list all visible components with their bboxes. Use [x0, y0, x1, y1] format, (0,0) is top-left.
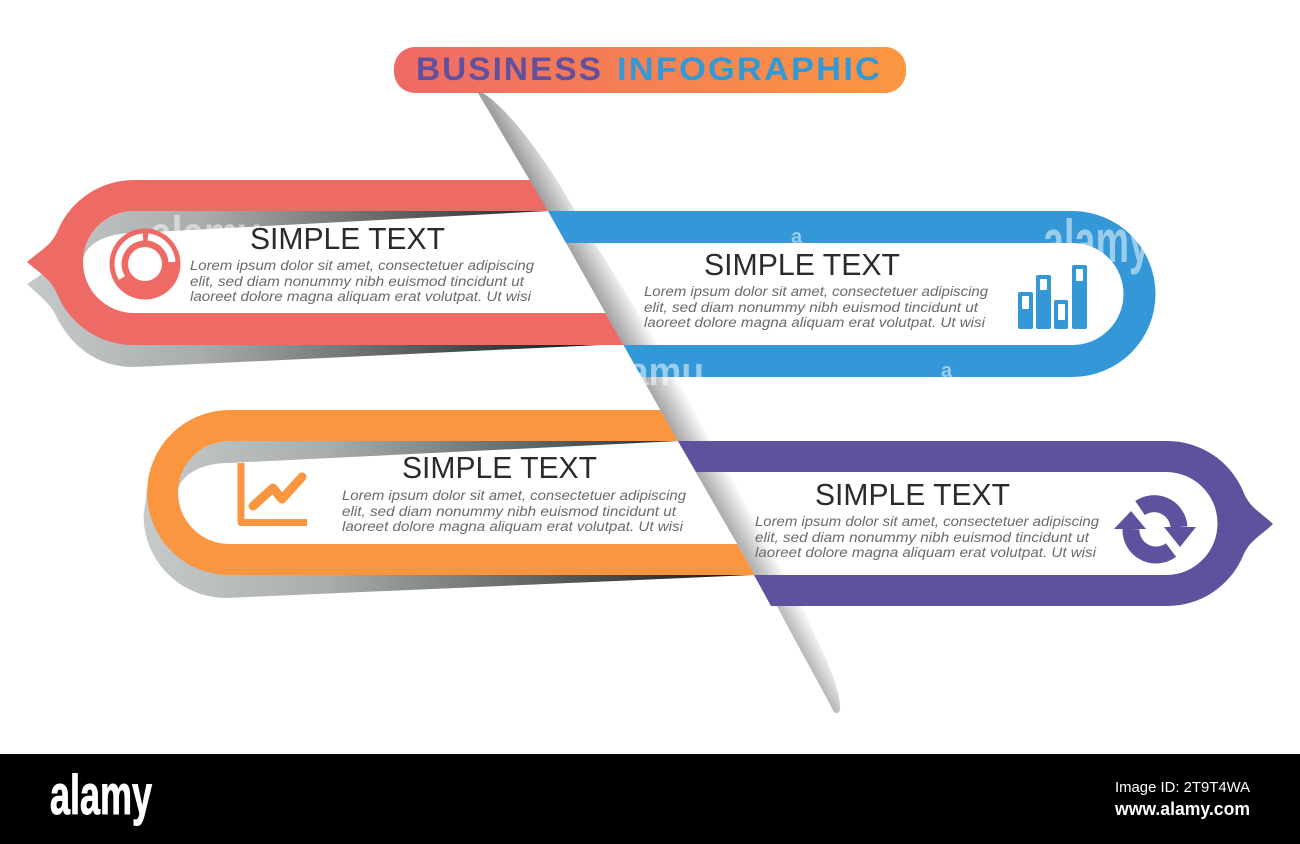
icon: donut chart — [110, 228, 180, 300]
red body text: laoreet dolore magna aliquam erat volutpat. Ut wisi — [190, 289, 532, 304]
watermarks on blue ribbon: amu — [628, 350, 704, 394]
red inner shadow — [83, 211, 548, 262]
footer bar — [0, 754, 1300, 844]
panel: purple step — [678, 441, 1273, 606]
red body text: Lorem ipsum dolor sit amet, consectetuer adipiscing — [190, 258, 535, 273]
orange body text — [342, 488, 687, 534]
watermarks on blue ribbon: alamy — [1043, 208, 1150, 275]
footer url: www.alamy.com — [1114, 799, 1250, 819]
panel: blue step — [548, 208, 1156, 394]
orange body text: elit, sed diam nonummy nibh euismod tincidunt ut — [342, 504, 677, 519]
blue body text: laoreet dolore magna aliquam erat volutpat. Ut wisi — [644, 315, 986, 330]
orange inner shadow — [178, 441, 679, 492]
purple body text: Lorem ipsum dolor sit amet, consectetuer adipiscing — [755, 514, 1100, 529]
central diagonal blade — [478, 93, 840, 713]
orange heading: SIMPLE TEXT — [402, 450, 597, 485]
blue body text: elit, sed diam nonummy nibh euismod tincidunt ut — [644, 300, 979, 315]
blue heading: SIMPLE TEXT — [704, 247, 900, 282]
purple ribbon — [678, 441, 1273, 606]
blue body text: Lorem ipsum dolor sit amet, consectetuer adipiscing — [644, 284, 989, 299]
blue body text — [644, 284, 989, 330]
orange bottom shadow — [144, 490, 752, 598]
icon: refresh arrows — [1114, 504, 1196, 555]
title pill — [394, 47, 906, 93]
purple heading: SIMPLE TEXT — [815, 477, 1010, 512]
blue ribbon — [548, 211, 1156, 377]
orange body text: laoreet dolore magna aliquam erat volutpat. Ut wisi — [342, 519, 684, 534]
purple body text: laoreet dolore magna aliquam erat volutpat. Ut wisi — [755, 545, 1097, 560]
footer logo: alamy — [50, 763, 152, 826]
red body text: elit, sed diam nonummy nibh euismod tincidunt ut — [190, 274, 525, 289]
panel: red step — [27, 180, 624, 367]
red bottom shadow — [27, 262, 600, 367]
red body text — [190, 258, 535, 304]
orange ribbon — [147, 410, 755, 575]
red ribbon — [27, 180, 624, 345]
footer image id: Image ID: 2T9T4WA — [1115, 779, 1250, 796]
icon: bar chart — [1018, 265, 1087, 329]
watermarks on blue ribbon — [628, 208, 1150, 394]
orange body text: Lorem ipsum dolor sit amet, consectetuer adipiscing — [342, 488, 687, 503]
purple body text — [755, 514, 1100, 560]
icon: line chart — [241, 463, 307, 522]
purple body text: elit, sed diam nonummy nibh euismod tincidunt ut — [755, 530, 1090, 545]
title word: business: BUSINESS — [416, 51, 603, 87]
title word: infographic: INFOGRAPHIC — [617, 51, 882, 87]
watermarks on blue ribbon: a — [791, 226, 803, 248]
red heading: SIMPLE TEXT — [250, 221, 445, 256]
panel: orange step — [144, 410, 755, 598]
watermarks on blue ribbon: a — [941, 360, 953, 382]
watermark on red shadow: alamy — [150, 208, 260, 261]
